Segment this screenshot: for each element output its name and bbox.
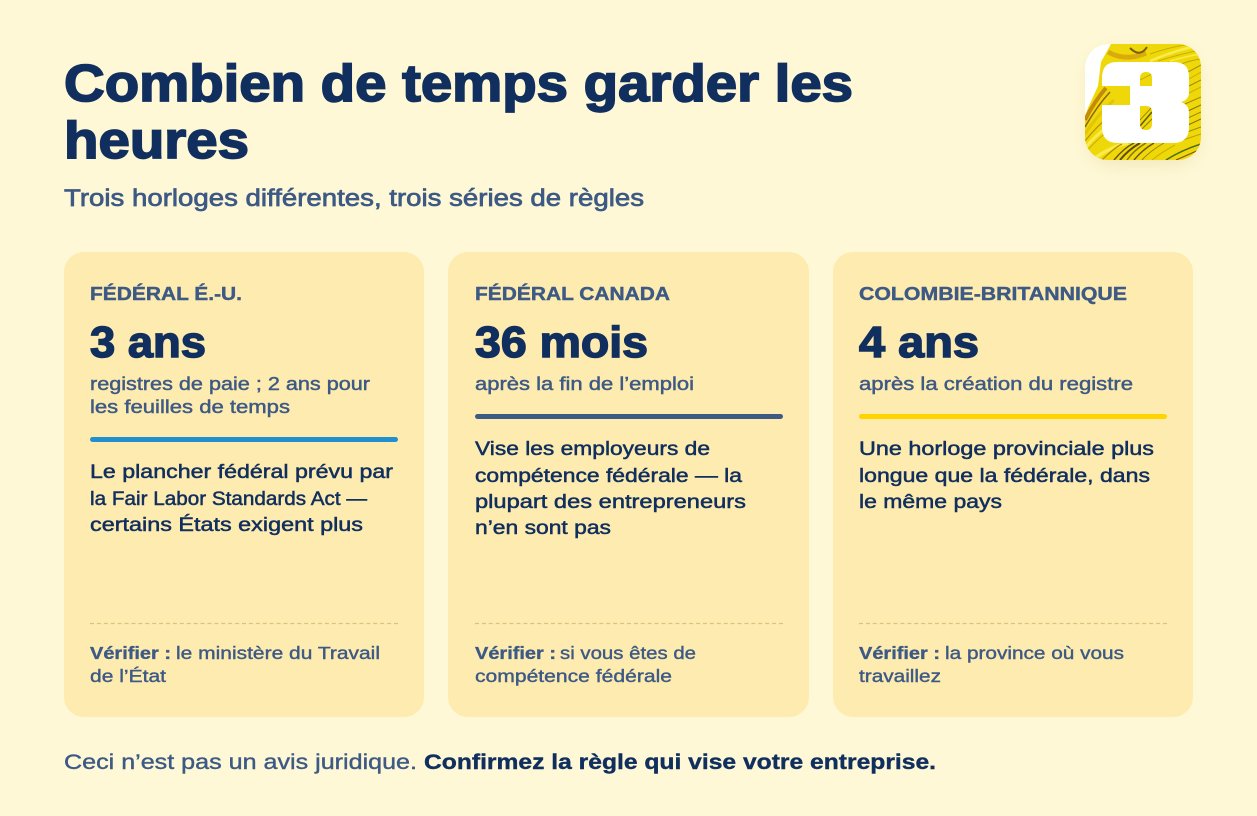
description: certains États exigent plus	[90, 513, 363, 536]
big duration: 36 mois	[475, 318, 648, 367]
duration detail: après la fin de l’emploi	[475, 374, 694, 394]
icon: number three logo	[1085, 44, 1201, 164]
verification note: compétence fédérale	[475, 666, 672, 686]
description: Une horloge provinciale plus	[859, 438, 1154, 460]
panel: fédéral É.-U.	[64, 252, 424, 717]
accent bar	[90, 437, 398, 442]
verification note: travaillez	[859, 666, 941, 686]
verification note	[859, 643, 1124, 686]
title: heures	[64, 112, 249, 170]
panel: fédéral Canada	[448, 252, 809, 717]
duration detail: après la création du registre	[859, 374, 1133, 394]
accent bar	[475, 414, 783, 419]
verification note: Vérifier :	[859, 643, 940, 663]
big duration: 4 ans	[859, 318, 979, 367]
card label: FÉDÉRAL CANADA	[475, 283, 670, 304]
verification note: si vous êtes de	[560, 643, 696, 663]
subtitle: Trois horloges différentes, trois séries de règles	[64, 185, 644, 212]
card label: FÉDÉRAL É.-U.	[90, 283, 242, 304]
footer disclaimer: Ceci n’est pas un avis juridique.	[64, 750, 417, 774]
title: Combien de temps garder les	[64, 55, 853, 113]
description: Le plancher fédéral prévu par	[90, 461, 394, 483]
description	[475, 438, 746, 539]
description: longue que la fédérale, dans	[859, 465, 1150, 487]
verification note: la province où vous	[945, 643, 1124, 663]
duration detail: registres de paie ; 2 ans pour	[90, 374, 370, 394]
panel: Colombie-Britannique	[833, 252, 1193, 717]
card label: COLOMBIE-BRITANNIQUE	[859, 284, 1127, 304]
verification note: de l’État	[90, 666, 166, 686]
duration detail	[90, 374, 370, 417]
title	[64, 55, 853, 170]
description: Vise les employeurs de	[475, 438, 710, 460]
footer disclaimer	[64, 750, 936, 774]
duration detail: les feuilles de temps	[90, 397, 290, 417]
big duration: 3 ans	[90, 318, 206, 367]
verification note: Vérifier :	[90, 643, 171, 663]
verification note	[475, 643, 696, 686]
description: la Fair Labor Standards Act —	[90, 488, 368, 510]
verification note: le ministère du Travail	[176, 643, 380, 663]
verification note	[90, 643, 380, 686]
description: n’en sont pas	[475, 517, 611, 539]
description: compétence fédérale — la	[475, 465, 742, 487]
accent bar	[859, 414, 1167, 419]
description	[859, 438, 1154, 513]
description: plupart des entrepreneurs	[475, 491, 746, 513]
description	[90, 461, 394, 536]
description: le même pays	[859, 491, 1002, 513]
verification note: Vérifier :	[475, 643, 556, 663]
footer disclaimer: Confirmez la règle qui vise votre entreprise.	[424, 750, 936, 774]
